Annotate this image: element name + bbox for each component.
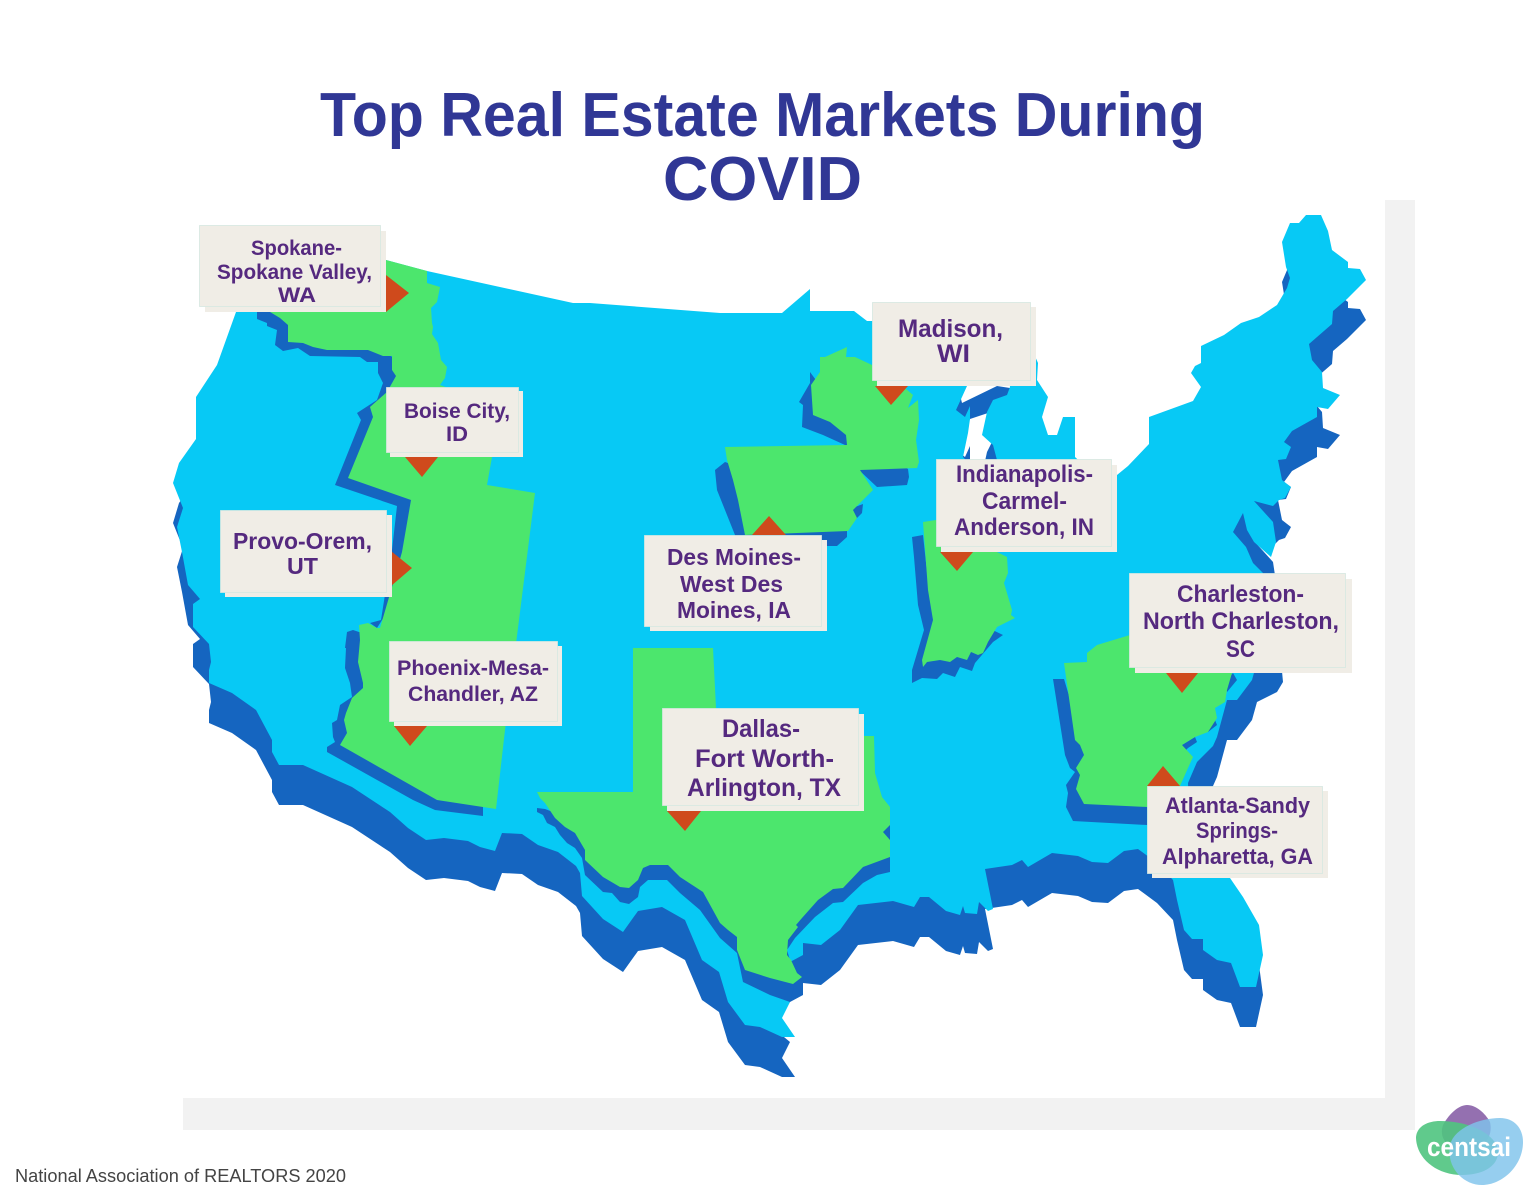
- centsai logo: [1416, 1105, 1523, 1185]
- callout: Boise City: ID: [446, 423, 468, 446]
- title: COVID: [663, 145, 862, 214]
- callout: Dallas-Fort Worth-Arlington: [662, 708, 864, 831]
- callout: Des Moines-West Des Moines: West Des: [680, 571, 783, 597]
- callout: Madison: Madison,: [898, 315, 1003, 343]
- grey L-shaped backdrop frame: [183, 200, 1415, 1130]
- callout: Provo-Orem: Provo-Orem,: [233, 528, 372, 554]
- highlighted states: Wisconsin and Iowa: [715, 347, 919, 546]
- highlighted state: Indiana: [912, 520, 1015, 683]
- callout: Phoenix-Mesa-Chandler: [390, 642, 562, 746]
- callout: Madison: WI: [937, 340, 970, 368]
- US map: [173, 215, 1366, 1077]
- callout: Dallas-Fort Worth-Arlington: Dallas-: [722, 715, 800, 743]
- callout: Charleston-North Charleston: Charleston-: [1177, 581, 1304, 608]
- callout: Charleston-North Charleston: North Charleston,: [1143, 608, 1339, 635]
- callout: Phoenix-Mesa-Chandler: Chandler, AZ: [408, 683, 538, 706]
- title: [320, 81, 1205, 214]
- callout: Indianapolis-Carmel-Anderson: [936, 460, 1117, 571]
- callout: Madison: [872, 302, 1036, 405]
- callout: Dallas-Fort Worth-Arlington: Arlington, TX: [687, 774, 841, 802]
- title: Top Real Estate Markets During: [320, 81, 1205, 150]
- centsai logo: centsai: [1427, 1132, 1511, 1162]
- map extrusion shadow: [173, 255, 1366, 1077]
- callout: Des Moines-West Des Moines: Des Moines-: [667, 544, 801, 570]
- callout: Des Moines-West Des Moines: [644, 516, 827, 631]
- callout: Boise City: [386, 388, 523, 477]
- highlighted state: Texas: [537, 648, 890, 1002]
- callout: Dallas-Fort Worth-Arlington: Fort Worth-: [695, 745, 834, 773]
- callout: Charleston-North Charleston: [1130, 574, 1352, 693]
- callout: Des Moines-West Des Moines: Moines, IA: [677, 597, 791, 623]
- callout: Spokane: WA: [278, 284, 316, 307]
- callout: Indianapolis-Carmel-Anderson: Indianapolis-: [956, 461, 1093, 488]
- callout: Atlanta-Sandy Springs-Alpharetta: Alpharetta, GA: [1162, 844, 1313, 869]
- callout: Spokane: [200, 226, 409, 312]
- callout: Indianapolis-Carmel-Anderson: Carmel-: [982, 488, 1067, 515]
- callout: Atlanta-Sandy Springs-Alpharetta: Springs-: [1196, 818, 1278, 843]
- callout: Provo-Orem: [220, 510, 412, 597]
- source note: National Association of REALTORS 2020: [15, 1166, 346, 1186]
- callout: Phoenix-Mesa-Chandler: Phoenix-Mesa-: [397, 657, 549, 680]
- callout: Indianapolis-Carmel-Anderson: Anderson, IN: [954, 514, 1094, 541]
- highlighted western states: Washington, Idaho, Utah, Arizona: [257, 260, 535, 816]
- callout: Spokane: Spokane Valley,: [217, 261, 372, 284]
- map land mass: [173, 215, 1366, 1037]
- callout: Atlanta-Sandy Springs-Alpharetta: Atlanta-Sandy: [1165, 793, 1311, 818]
- callout: Boise City: Boise City,: [404, 400, 510, 423]
- callout: Charleston-North Charleston: SC: [1226, 636, 1255, 663]
- callout: Atlanta-Sandy Springs-Alpharetta: [1147, 766, 1328, 878]
- callout: Spokane: Spokane-: [251, 237, 342, 260]
- callout: Provo-Orem: UT: [287, 553, 318, 579]
- highlighted states: Georgia and South Carolina: [1053, 635, 1237, 825]
